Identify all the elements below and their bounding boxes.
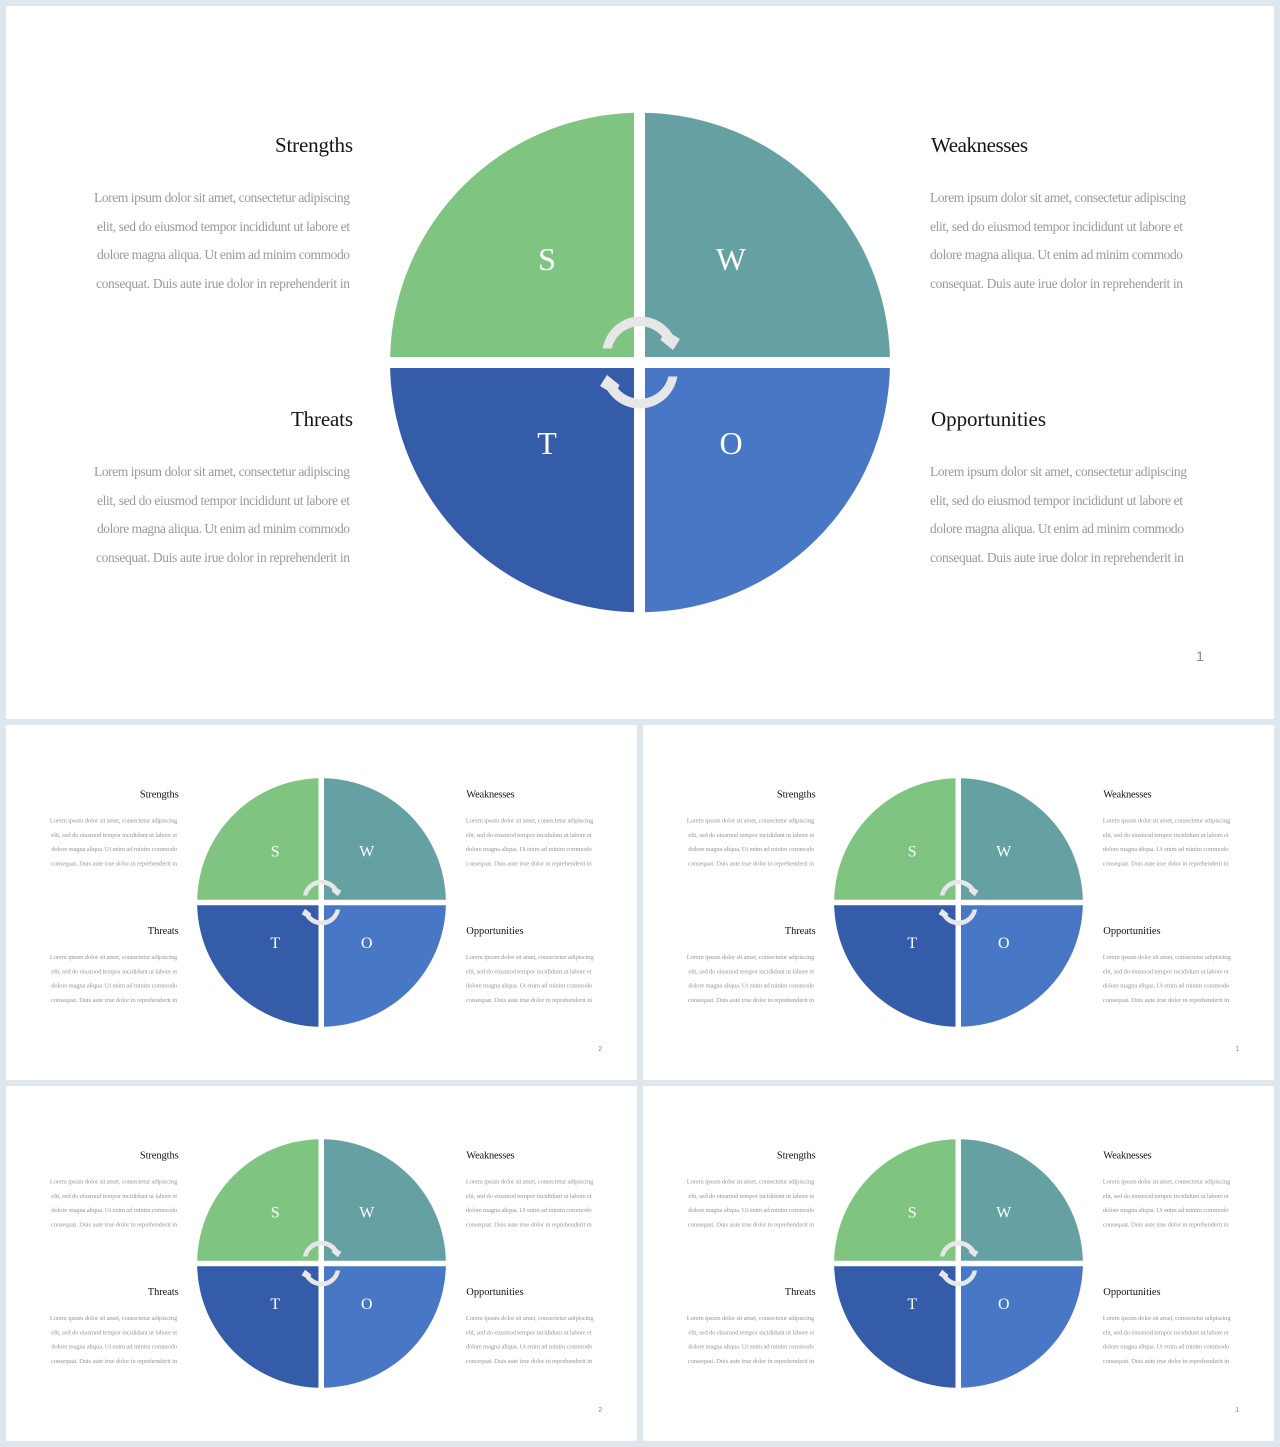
quadrant: S [834, 778, 956, 900]
text block: strengths body: dolore magna aliqua. Ut enim ad minim commodo [688, 846, 815, 853]
text block: strengths body: dolore magna aliqua. Ut enim ad minim commodo [97, 247, 350, 262]
arrow: bottom cycle [939, 1270, 977, 1286]
quadrant: O: O [719, 425, 743, 461]
text block: weaknesses body [1103, 1179, 1231, 1228]
quadrant: W [324, 1139, 446, 1261]
page number: 1 [1235, 1046, 1239, 1053]
text block: strengths body [687, 1179, 815, 1228]
text block: strengths body: elit, sed do eiusmod tempor incididunt ut labore et [688, 1193, 814, 1200]
page number: 2 [598, 1046, 602, 1053]
text block: opportunities body: elit, sed do eiusmod tempor incididunt ut labore et [466, 1329, 592, 1336]
text block: weaknesses body [466, 818, 594, 867]
quadrant: W: W [359, 843, 374, 860]
text block: opportunities body: dolore magna aliqua. Ut enim ad minim commodo [1103, 1343, 1230, 1350]
heading: Threats: Threats [785, 926, 816, 937]
heading: Weaknesses: Weaknesses [1103, 1151, 1152, 1162]
text block: strengths body: consequat. Duis aute irue dolor in reprehenderit in [51, 1221, 178, 1228]
panel: weaknesses text [1103, 1151, 1231, 1228]
text block: weaknesses body: consequat. Duis aute irue dolor in reprehenderit in [930, 276, 1183, 291]
text block: opportunities body [466, 954, 594, 1004]
quadrant: W: W [716, 241, 747, 277]
quadrant: S [197, 778, 319, 900]
panel: threats text [687, 1287, 816, 1365]
text block: strengths body: elit, sed do eiusmod tempor incididunt ut labore et [97, 219, 350, 234]
text block: weaknesses body: consequat. Duis aute irue dolor in reprehenderit in [466, 860, 592, 867]
text block: weaknesses body: dolore magna aliqua. Ut enim ad minim commodo [1103, 846, 1229, 853]
panel: weaknesses text [1103, 790, 1231, 867]
text block: threats body: dolore magna aliqua. Ut enim ad minim commodo [51, 982, 178, 989]
text block: weaknesses body: dolore magna aliqua. Ut enim ad minim commodo [1103, 1207, 1229, 1214]
panel: strengths text [687, 790, 816, 867]
heading: Opportunities: Opportunities [1103, 926, 1161, 937]
quadrant: W: W [359, 1204, 374, 1221]
quadrant: T: T [270, 935, 280, 952]
quadrant: S: S [271, 1204, 280, 1221]
quadrant: T: T [907, 935, 917, 952]
slide: small SWOT bottom left [6, 1086, 637, 1441]
text block: weaknesses body: dolore magna aliqua. Ut enim ad minim commodo [466, 846, 592, 853]
quadrant: O: O [361, 1296, 373, 1313]
chart: SWOT circle [390, 113, 890, 612]
chart: SWOT circle [197, 1139, 446, 1388]
panel: opportunities text [466, 926, 594, 1004]
text block: threats body: consequat. Duis aute irue dolor in reprehenderit in [96, 550, 350, 565]
text block: opportunities body: elit, sed do eiusmod tempor incididunt ut labore et [930, 493, 1183, 508]
text block: opportunities body: consequat. Duis aute irue dolor in reprehenderit in [1103, 997, 1230, 1004]
heading: Strengths: Strengths [140, 1151, 179, 1162]
quadrant: O [324, 905, 446, 1027]
text block: threats body: Lorem ipsum dolor sit amet, consectetur adipiscing [94, 464, 350, 479]
text block: weaknesses body: elit, sed do eiusmod tempor incididunt ut labore et [466, 1193, 592, 1200]
arrow: top cycle [940, 1241, 978, 1257]
text block: weaknesses body: Lorem ipsum dolor sit amet, consectetur adipiscing [466, 1179, 594, 1186]
quadrant: W: W [996, 843, 1011, 860]
text block: strengths body: elit, sed do eiusmod tempor incididunt ut labore et [688, 832, 814, 839]
text block: strengths body [50, 1179, 178, 1228]
text block: threats body: elit, sed do eiusmod tempor incididunt ut labore et [688, 1329, 814, 1336]
quadrant: W [324, 778, 446, 900]
text block: opportunities body: consequat. Duis aute irue dolor in reprehenderit in [466, 997, 593, 1004]
text block: weaknesses body: Lorem ipsum dolor sit amet, consectetur adipiscing [466, 818, 594, 825]
quadrant: T: T [537, 425, 557, 461]
quadrant: W [961, 1139, 1083, 1261]
quadrant: O [324, 1266, 446, 1388]
text block: threats body: consequat. Duis aute irue dolor in reprehenderit in [51, 997, 178, 1004]
quadrant: S [197, 1139, 319, 1261]
text block: weaknesses body: Lorem ipsum dolor sit amet, consectetur adipiscing [1103, 818, 1231, 825]
text block: weaknesses body: dolore magna aliqua. Ut enim ad minim commodo [466, 1207, 592, 1214]
text block: weaknesses body: Lorem ipsum dolor sit amet, consectetur adipiscing [930, 190, 1186, 205]
heading: Weaknesses: Weaknesses [466, 790, 515, 801]
text block: strengths body: dolore magna aliqua. Ut enim ad minim commodo [51, 846, 178, 853]
chart: SWOT circle [834, 1139, 1083, 1388]
text block: threats body: dolore magna aliqua. Ut enim ad minim commodo [97, 521, 350, 536]
text block: threats body: dolore magna aliqua. Ut enim ad minim commodo [51, 1343, 178, 1350]
slide: small SWOT top left [6, 725, 637, 1080]
heading: Threats: Threats [785, 1287, 816, 1298]
quadrant: O [645, 368, 890, 612]
text block: threats body: dolore magna aliqua. Ut enim ad minim commodo [688, 982, 815, 989]
panel: strengths text [50, 790, 179, 867]
text block: strengths body [50, 818, 178, 867]
text block: strengths body: elit, sed do eiusmod tempor incididunt ut labore et [51, 832, 177, 839]
text block: weaknesses body: elit, sed do eiusmod tempor incididunt ut labore et [930, 219, 1183, 234]
text block: opportunities body: consequat. Duis aute irue dolor in reprehenderit in [466, 1358, 593, 1365]
quadrant: T: T [270, 1296, 280, 1313]
text block: strengths body [687, 818, 815, 867]
quadrant: O: O [998, 935, 1010, 952]
arrow: top cycle [303, 880, 341, 896]
text block: threats body [94, 464, 350, 565]
quadrant: T [834, 905, 956, 1027]
quadrant: W: W [996, 1204, 1011, 1221]
heading: Strengths: Strengths [777, 790, 816, 801]
text block: opportunities body: consequat. Duis aute irue dolor in reprehenderit in [1103, 1358, 1230, 1365]
text block: weaknesses body: elit, sed do eiusmod tempor incididunt ut labore et [1103, 1193, 1229, 1200]
text block: weaknesses body [1103, 818, 1231, 867]
text block: threats body: Lorem ipsum dolor sit amet, consectetur adipiscing [50, 1315, 178, 1322]
slide: small SWOT bottom right [643, 1086, 1274, 1441]
text block: weaknesses body: consequat. Duis aute irue dolor in reprehenderit in [466, 1221, 592, 1228]
text block: opportunities body: elit, sed do eiusmod tempor incididunt ut labore et [1103, 968, 1229, 975]
panel: weaknesses text [930, 133, 1186, 291]
quadrant: S: S [908, 843, 917, 860]
panel: threats text [50, 926, 179, 1004]
text block: threats body [687, 1315, 815, 1365]
heading: Opportunities: Opportunities [1103, 1287, 1161, 1298]
heading: Strengths: Strengths [777, 1151, 816, 1162]
quadrant: T [834, 1266, 956, 1388]
panel: strengths text [50, 1151, 179, 1228]
arrow: top cycle [940, 880, 978, 896]
text block: weaknesses body: dolore magna aliqua. Ut enim ad minim commodo [930, 247, 1183, 262]
text block: opportunities body: dolore magna aliqua. Ut enim ad minim commodo [466, 982, 593, 989]
panel: strengths text [687, 1151, 816, 1228]
quadrant: W [645, 113, 890, 357]
text block: threats body [50, 954, 178, 1004]
page number: 2 [598, 1407, 602, 1414]
quadrant: T [197, 1266, 319, 1388]
text block: threats body: Lorem ipsum dolor sit amet, consectetur adipiscing [687, 954, 815, 961]
quadrant: S: S [908, 1204, 917, 1221]
text block: threats body: consequat. Duis aute irue dolor in reprehenderit in [51, 1358, 178, 1365]
quadrant: O: O [998, 1296, 1010, 1313]
quadrant: S [390, 113, 634, 357]
text block: strengths body: Lorem ipsum dolor sit amet, consectetur adipiscing [94, 190, 350, 205]
text block: threats body: consequat. Duis aute irue dolor in reprehenderit in [688, 1358, 815, 1365]
text block: strengths body: Lorem ipsum dolor sit amet, consectetur adipiscing [50, 1179, 178, 1186]
quadrant: S: S [271, 843, 280, 860]
text block: weaknesses body: elit, sed do eiusmod tempor incididunt ut labore et [466, 832, 592, 839]
quadrant: O [961, 905, 1083, 1027]
panel: weaknesses text [466, 790, 594, 867]
text block: opportunities body: dolore magna aliqua. Ut enim ad minim commodo [1103, 982, 1230, 989]
text block: threats body: consequat. Duis aute irue dolor in reprehenderit in [688, 997, 815, 1004]
quadrant: S: S [538, 241, 556, 277]
quadrant: T [390, 368, 634, 612]
text block: opportunities body [1103, 1315, 1231, 1365]
text block: threats body: elit, sed do eiusmod tempor incididunt ut labore et [51, 1329, 177, 1336]
text block: opportunities body: dolore magna aliqua. Ut enim ad minim commodo [466, 1343, 593, 1350]
text block: weaknesses body: elit, sed do eiusmod tempor incididunt ut labore et [1103, 832, 1229, 839]
text block: strengths body: consequat. Duis aute irue dolor in reprehenderit in [688, 1221, 815, 1228]
text block: opportunities body [466, 1315, 594, 1365]
quadrant: S [834, 1139, 956, 1261]
text block: strengths body: Lorem ipsum dolor sit amet, consectetur adipiscing [687, 818, 815, 825]
chart: SWOT circle [834, 778, 1083, 1027]
heading: Threats: Threats [291, 407, 353, 431]
text block: strengths body: dolore magna aliqua. Ut enim ad minim commodo [51, 1207, 178, 1214]
text block: weaknesses body: Lorem ipsum dolor sit amet, consectetur adipiscing [1103, 1179, 1231, 1186]
text block: opportunities body: elit, sed do eiusmod tempor incididunt ut labore et [1103, 1329, 1229, 1336]
panel: weaknesses text [466, 1151, 594, 1228]
heading: Opportunities: Opportunities [466, 1287, 524, 1298]
quadrant: T [197, 905, 319, 1027]
heading: Opportunities: Opportunities [931, 407, 1046, 431]
panel: threats text [687, 926, 816, 1004]
slide: small SWOT top right [643, 725, 1274, 1080]
text block: strengths body: consequat. Duis aute irue dolor in reprehenderit in [51, 860, 178, 867]
page number: 1 [1235, 1407, 1239, 1414]
text block: weaknesses body: consequat. Duis aute irue dolor in reprehenderit in [1103, 860, 1229, 867]
text block: threats body [687, 954, 815, 1004]
text block: strengths body: consequat. Duis aute irue dolor in reprehenderit in [688, 860, 815, 867]
heading: Weaknesses: Weaknesses [1103, 790, 1152, 801]
text block: threats body [50, 1315, 178, 1365]
heading: Weaknesses: Weaknesses [931, 133, 1028, 157]
text block: weaknesses body: consequat. Duis aute irue dolor in reprehenderit in [1103, 1221, 1229, 1228]
text block: opportunities body: elit, sed do eiusmod tempor incididunt ut labore et [466, 968, 592, 975]
text block: weaknesses body [930, 190, 1186, 291]
text block: strengths body: Lorem ipsum dolor sit amet, consectetur adipiscing [687, 1179, 815, 1186]
text block: strengths body: elit, sed do eiusmod tempor incididunt ut labore et [51, 1193, 177, 1200]
page number: 1 [1196, 648, 1204, 664]
arrow: top cycle [603, 317, 680, 350]
panel: opportunities text [466, 1287, 594, 1365]
quadrant: O: O [361, 935, 373, 952]
text block: threats body: Lorem ipsum dolor sit amet, consectetur adipiscing [687, 1315, 815, 1322]
heading: Strengths: Strengths [140, 790, 179, 801]
panel: threats text [50, 1287, 179, 1365]
text block: strengths body [94, 190, 350, 291]
arrow: bottom cycle [600, 375, 677, 408]
text block: weaknesses body [466, 1179, 594, 1228]
quadrant: O [961, 1266, 1083, 1388]
text block: opportunities body [930, 464, 1187, 565]
text block: opportunities body: dolore magna aliqua. Ut enim ad minim commodo [930, 521, 1184, 536]
text block: threats body: elit, sed do eiusmod tempor incididunt ut labore et [97, 493, 350, 508]
text block: opportunities body: Lorem ipsum dolor sit amet, consectetur adipiscing [1103, 954, 1231, 961]
heading: Opportunities: Opportunities [466, 926, 524, 937]
heading: Threats: Threats [148, 1287, 179, 1298]
slide: large SWOT [6, 6, 1274, 719]
text block: threats body: elit, sed do eiusmod tempor incididunt ut labore et [51, 968, 177, 975]
quadrant: W [961, 778, 1083, 900]
panel: opportunities text [930, 407, 1187, 565]
text block: strengths body: dolore magna aliqua. Ut enim ad minim commodo [688, 1207, 815, 1214]
arrow: bottom cycle [939, 909, 977, 925]
text block: strengths body: Lorem ipsum dolor sit amet, consectetur adipiscing [50, 818, 178, 825]
arrow: bottom cycle [302, 909, 340, 925]
heading: Weaknesses: Weaknesses [466, 1151, 515, 1162]
text block: opportunities body: Lorem ipsum dolor sit amet, consectetur adipiscing [930, 464, 1187, 479]
chart: SWOT circle [197, 778, 446, 1027]
text block: opportunities body: Lorem ipsum dolor sit amet, consectetur adipiscing [1103, 1315, 1231, 1322]
text block: opportunities body: Lorem ipsum dolor sit amet, consectetur adipiscing [466, 1315, 594, 1322]
text block: threats body: elit, sed do eiusmod tempor incididunt ut labore et [688, 968, 814, 975]
arrow: bottom cycle [302, 1270, 340, 1286]
text block: strengths body: consequat. Duis aute irue dolor in reprehenderit in [96, 276, 350, 291]
heading: Strengths: Strengths [275, 133, 353, 157]
text block: opportunities body [1103, 954, 1231, 1004]
heading: Threats: Threats [148, 926, 179, 937]
quadrant: T: T [907, 1296, 917, 1313]
panel: strengths text [94, 133, 353, 291]
text block: threats body: Lorem ipsum dolor sit amet, consectetur adipiscing [50, 954, 178, 961]
arrow: top cycle [303, 1241, 341, 1257]
text block: opportunities body: consequat. Duis aute irue dolor in reprehenderit in [930, 550, 1184, 565]
panel: threats text [94, 407, 353, 565]
panel: opportunities text [1103, 1287, 1231, 1365]
text block: opportunities body: Lorem ipsum dolor sit amet, consectetur adipiscing [466, 954, 594, 961]
panel: opportunities text [1103, 926, 1231, 1004]
text block: threats body: dolore magna aliqua. Ut enim ad minim commodo [688, 1343, 815, 1350]
